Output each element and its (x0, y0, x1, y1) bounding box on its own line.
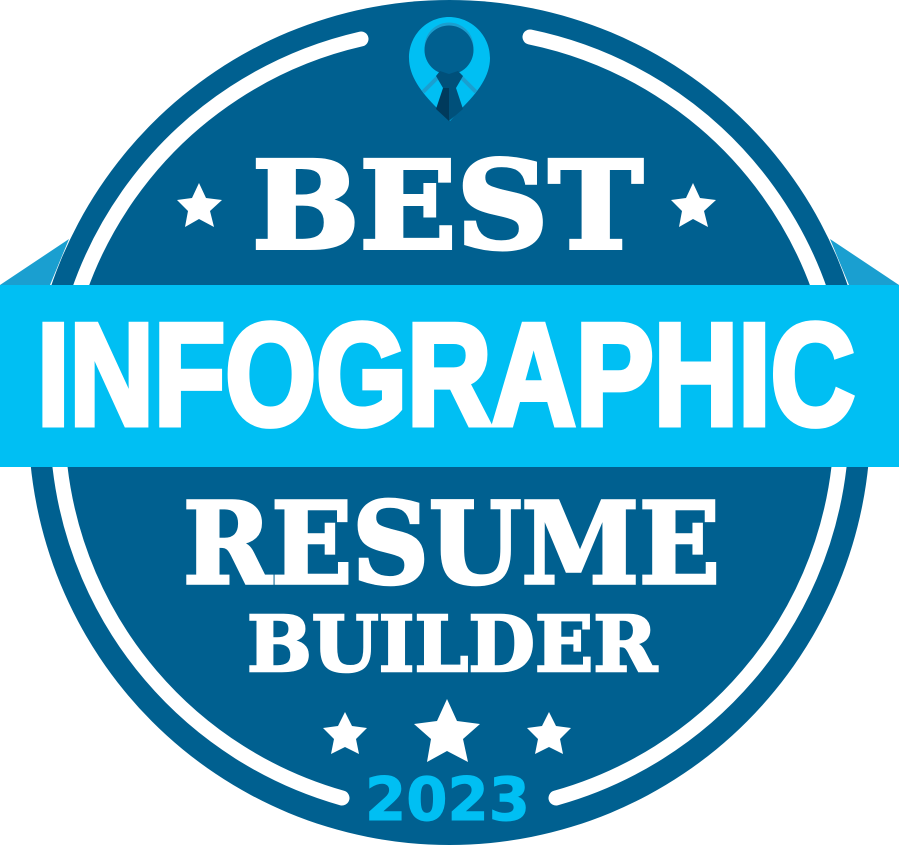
right banner fold (830, 239, 899, 285)
icon: bottom centre star (414, 699, 480, 762)
icon: left star (177, 183, 222, 227)
icon: bottom right star (527, 712, 571, 754)
left banner fold (0, 239, 69, 285)
year: 2023: 2023 (365, 765, 530, 835)
heading: BEST: BEST (252, 134, 643, 277)
icon: bottom left star (323, 712, 367, 754)
white ring, upper left arc (57, 39, 361, 798)
heading: BUILDER: BUILDER (247, 600, 658, 690)
white ring, right arc (530, 37, 842, 798)
heading: RESUME: RESUME (183, 479, 720, 610)
banner (0, 285, 899, 467)
icon: right star (671, 183, 716, 227)
icon: location pin with necktie (409, 17, 490, 121)
